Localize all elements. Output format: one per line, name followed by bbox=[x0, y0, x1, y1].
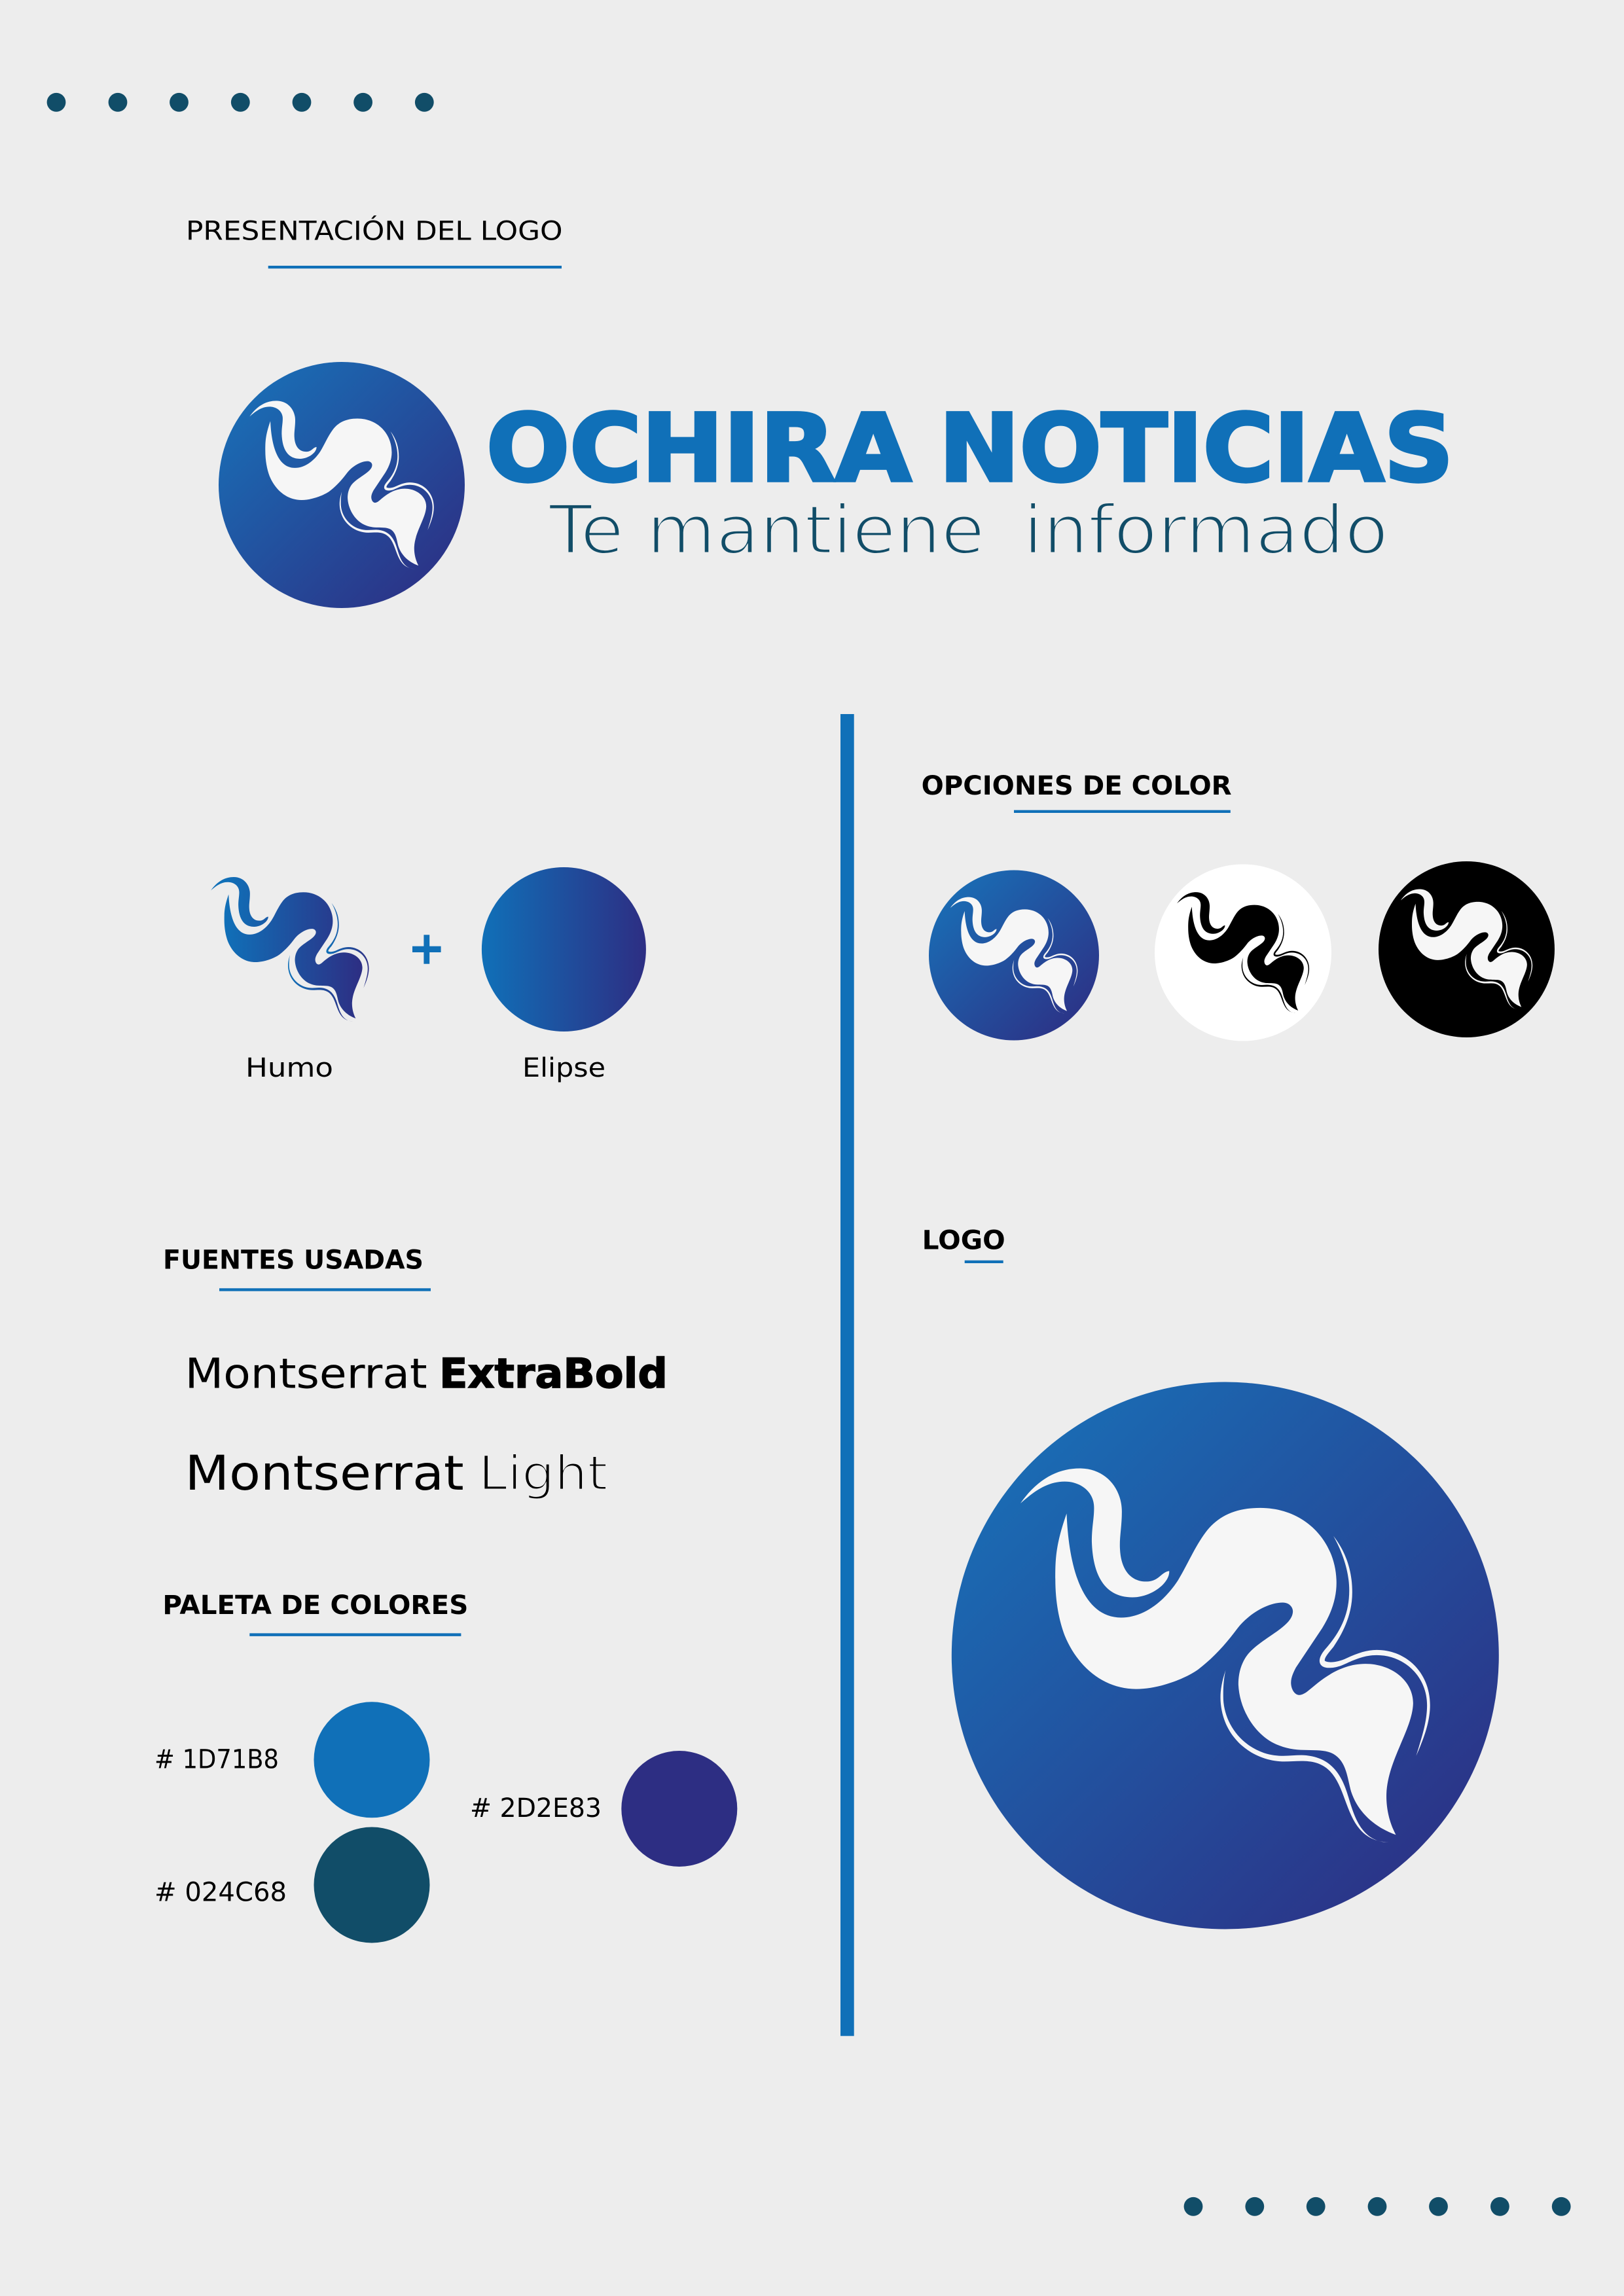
heading: paleta de colores: PALETA DE COLORES bbox=[162, 1590, 468, 1621]
heading: paleta de colores bbox=[162, 1590, 468, 1636]
top decorative dots bbox=[47, 93, 434, 112]
palette swatch: 024C68 bbox=[154, 1827, 429, 1943]
color option: black bbox=[1379, 861, 1555, 1037]
vertical divider bbox=[840, 714, 854, 2036]
heading: presentación del logo bbox=[186, 215, 563, 268]
tagline: te mantiene informado: Te mantiene bbox=[548, 492, 984, 570]
plus sign bbox=[412, 935, 441, 964]
brand name: ochira noticias: OCHIRA bbox=[486, 395, 911, 503]
heading: fuentes usadas bbox=[163, 1246, 431, 1291]
logo construction: elipse: Elipse bbox=[522, 1053, 605, 1083]
palette swatch: 1D71B8 bbox=[154, 1702, 429, 1818]
heading: opciones de color: OPCIONES DE COLOR bbox=[922, 771, 1232, 801]
palette swatch: 1D71B8: # 1D71B8 bbox=[154, 1745, 279, 1775]
heading: logo: LOGO bbox=[922, 1226, 1005, 1256]
brand name: ochira noticias: NOTICIAS bbox=[939, 395, 1453, 503]
font sample: montserrat extrabold: Montserrat bbox=[185, 1350, 427, 1398]
font sample: montserrat light: Light bbox=[478, 1446, 607, 1501]
heading: presentación del logo: PRESENTACIÓN DEL LOGO bbox=[186, 215, 563, 247]
palette swatch: 024C68: # 024C68 bbox=[154, 1878, 287, 1908]
font sample: montserrat extrabold: ExtraBold bbox=[439, 1350, 668, 1397]
tagline: te mantiene informado bbox=[548, 492, 1388, 570]
heading: fuentes usadas: FUENTES USADAS bbox=[163, 1246, 424, 1276]
font sample: montserrat light: Montserrat bbox=[185, 1446, 464, 1501]
brand name: ochira noticias bbox=[486, 395, 1453, 503]
color option: blue bbox=[929, 870, 1099, 1041]
logo construction: humo: Humo bbox=[245, 1053, 333, 1083]
palette swatch: 2D2E83: # 2D2E83 bbox=[470, 1793, 602, 1823]
font sample: montserrat extrabold bbox=[185, 1350, 668, 1398]
color option: white bbox=[1155, 864, 1331, 1041]
logo construction: humo bbox=[211, 877, 369, 1083]
tagline: te mantiene informado: informado bbox=[1023, 492, 1388, 570]
hero logo mark bbox=[219, 362, 465, 608]
bottom decorative dots bbox=[1184, 2197, 1571, 2216]
large logo mark bbox=[952, 1382, 1499, 1929]
font sample: montserrat light bbox=[185, 1446, 607, 1501]
logo construction: elipse bbox=[482, 867, 646, 1083]
palette swatch: 2D2E83 bbox=[470, 1751, 737, 1867]
